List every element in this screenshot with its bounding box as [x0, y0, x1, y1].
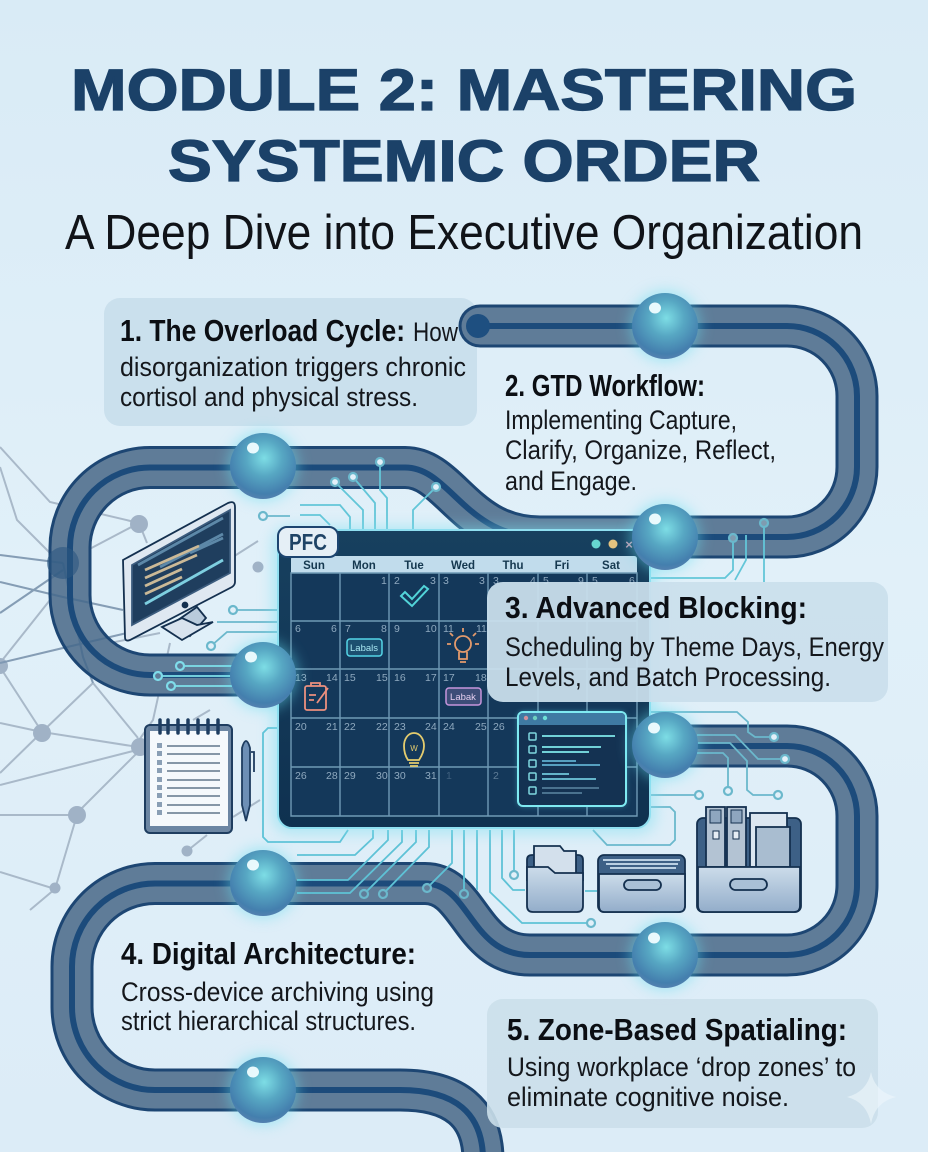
- panel: digital architecture: [121, 936, 434, 1036]
- panel: the overload cycle: How: [413, 317, 458, 347]
- icon: notepad and pen: [145, 720, 254, 833]
- subtitle: A Deep Dive into Executive Organization: [65, 206, 863, 260]
- panel: zone-based spatialing: eliminate cognitive noise.: [507, 1082, 789, 1112]
- icon: yellow light bulb: [404, 733, 424, 766]
- calendar dates: 8: [381, 623, 387, 635]
- weekday header: Mon: [352, 560, 376, 572]
- calendar dates: 26: [295, 770, 307, 782]
- calendar window: [272, 526, 656, 834]
- calendar dates: 15: [344, 672, 356, 684]
- weekday header: Wed: [451, 560, 475, 572]
- calendar dates: 15: [376, 672, 388, 684]
- calendar dates: 26: [493, 721, 505, 733]
- panel: advanced blocking: Levels, and Batch Processing.: [505, 662, 831, 692]
- weekday header: Sun: [303, 560, 325, 572]
- calendar dates: 31: [425, 770, 437, 782]
- window control dots: ×: [625, 537, 633, 552]
- label tag purple: Labak: [450, 692, 476, 703]
- calendar dates: 3: [493, 575, 499, 587]
- panel: the overload cycle: disorganization triggers chronic: [120, 352, 466, 382]
- winding track: [0, 304, 857, 1152]
- calendar dates: 6: [331, 623, 337, 635]
- panel: zone-based spatialing: 5. Zone-Based Spatialing:: [507, 1012, 847, 1047]
- label tag teal: [347, 639, 382, 656]
- calendar dates: 17: [425, 672, 437, 684]
- panel: zone-based spatialing: Using workplace ‘drop zones’ to: [507, 1052, 856, 1082]
- panel: GTD workflow: Implementing Capture,: [505, 405, 737, 435]
- weekday header: Thu: [502, 560, 524, 572]
- panel: advanced blocking: 3. Advanced Blocking:: [505, 590, 807, 625]
- calendar dates: 30: [394, 770, 406, 782]
- panel: the overload cycle: cortisol and physical stress.: [120, 382, 418, 412]
- panel: digital architecture: 4. Digital Architecture:: [121, 936, 416, 971]
- icon: binder box: [697, 807, 801, 912]
- calendar dates: 5: [543, 575, 549, 587]
- calendar dates: 18: [475, 672, 487, 684]
- calendar dates: 9: [394, 623, 400, 635]
- label tag teal: Labals: [350, 643, 378, 654]
- circuit traces: [154, 458, 789, 927]
- calendar dates: 1: [381, 575, 387, 587]
- calendar dates: 11: [443, 623, 454, 635]
- panel: advanced blocking: [487, 582, 888, 702]
- label tag purple: [446, 688, 481, 705]
- calendar dates: 20: [295, 721, 307, 733]
- calendar dates: 24: [425, 721, 437, 733]
- network seen through the track: [0, 555, 127, 683]
- calendar grid: [291, 573, 637, 816]
- calendar dates: 6: [295, 623, 301, 635]
- calendar dates: 24: [443, 721, 455, 733]
- icon: sparkle: [847, 1072, 896, 1124]
- calendar dates: 29: [344, 770, 356, 782]
- PFC label: [278, 527, 338, 557]
- icon: yellow light bulb: W: [410, 744, 418, 753]
- calendar dates: 3: [430, 575, 436, 587]
- calendar dates: 22: [376, 721, 388, 733]
- panel: GTD workflow: [505, 368, 776, 496]
- calendar dates: 2: [394, 575, 400, 587]
- calendar dates: 28: [326, 770, 338, 782]
- calendar dates: 1: [446, 770, 452, 782]
- calendar dates: 6: [629, 575, 635, 587]
- weekday header: Sat: [602, 560, 620, 572]
- icon: desktop monitor: [123, 502, 235, 641]
- calendar dates: 23: [394, 721, 406, 733]
- connection balls: [228, 291, 700, 1125]
- title: [71, 58, 857, 194]
- calendar dates: 17: [443, 672, 455, 684]
- calendar dates: 3: [479, 575, 485, 587]
- panel: digital architecture: strict hierarchical structures.: [121, 1006, 416, 1036]
- calendar dates: [295, 575, 635, 782]
- weekday header: Tue: [404, 560, 424, 572]
- icon: clipboard: [305, 683, 328, 710]
- panel: GTD workflow: Clarify, Organize, Reflect,: [505, 435, 776, 465]
- icon: file drawer: [598, 855, 685, 912]
- calendar dates: 14: [326, 672, 338, 684]
- panel: GTD workflow: 2. GTD Workflow:: [505, 368, 705, 403]
- calendar dates: 30: [376, 770, 388, 782]
- calendar dates: 25: [475, 721, 487, 733]
- calendar dates: 7: [345, 623, 351, 635]
- calendar dates: 11: [476, 623, 487, 635]
- PFC label: PFC: [289, 529, 327, 555]
- icon: checkmark: [401, 586, 428, 606]
- panel: the overload cycle: 1. The Overload Cycle:: [120, 313, 405, 348]
- calendar dates: 21: [326, 721, 338, 733]
- checklist window: [518, 712, 626, 806]
- icon: folder: [527, 846, 583, 912]
- panel: advanced blocking: Scheduling by Theme Days, Energy: [505, 632, 884, 662]
- weekday header: [291, 556, 637, 573]
- calendar dates: 5: [592, 575, 598, 587]
- panel: digital architecture: Cross-device archiving using: [121, 977, 434, 1007]
- calendar dates: 4: [530, 575, 536, 587]
- title: SYSTEMIC ORDER: [168, 129, 760, 194]
- calendar dates: 2: [493, 770, 499, 782]
- title: MODULE 2: MASTERING: [71, 58, 857, 123]
- calendar dates: 3: [443, 575, 449, 587]
- icon: orange light bulb: [447, 628, 479, 662]
- panel: zone-based spatialing: [487, 999, 878, 1128]
- window control dots: [592, 537, 633, 552]
- calendar dates: 13: [295, 672, 307, 684]
- calendar dates: 10: [425, 623, 437, 635]
- weekday header: Fri: [555, 560, 569, 572]
- panel: the overload cycle: [104, 298, 477, 426]
- calendar dates: 22: [344, 721, 356, 733]
- panel: GTD workflow: and Engage.: [505, 466, 637, 496]
- calendar dates: 16: [394, 672, 406, 684]
- neural network backdrop: [0, 447, 264, 910]
- calendar dates: 9: [578, 575, 584, 587]
